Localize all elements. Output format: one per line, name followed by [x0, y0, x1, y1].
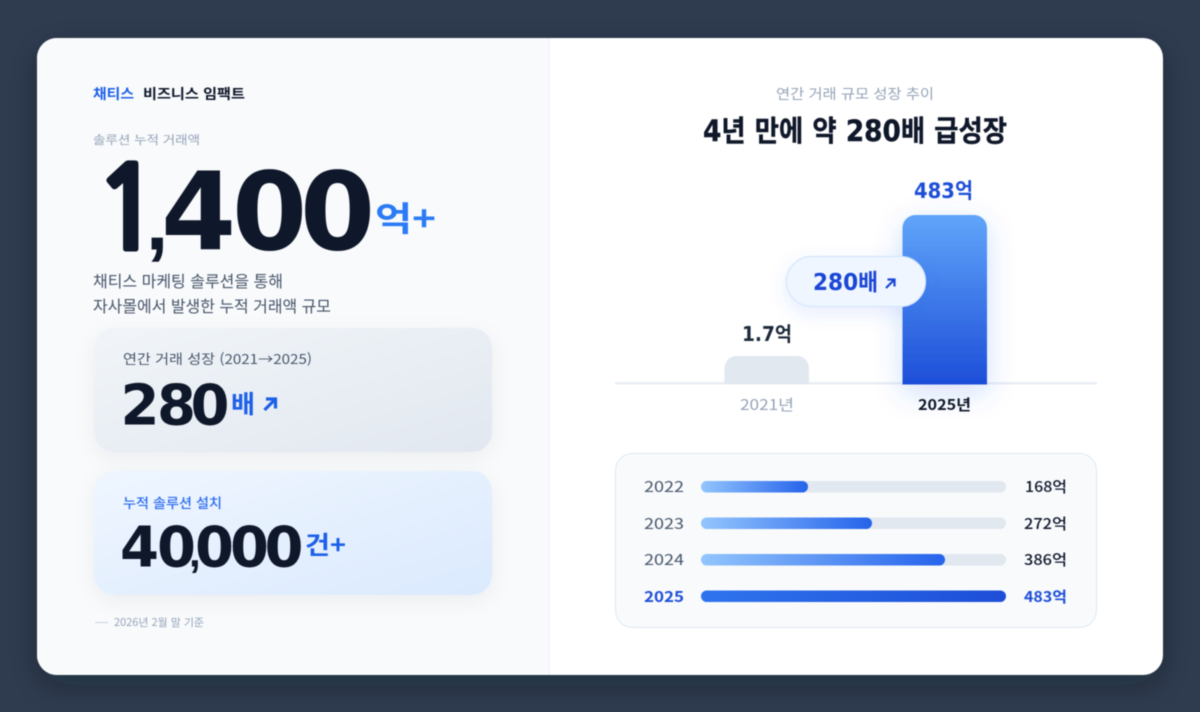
card label: 연간 거래 성장 (2021→2025): [123, 348, 312, 368]
footnote: 2026년 2월 말 기준: [114, 615, 204, 630]
bar: 2021: 1.7억: [742, 322, 792, 346]
card value: 280: 8: [157, 374, 196, 438]
bar chart: 2021 vs 2025: [615, 179, 1097, 415]
bar: 2025: 483억: [914, 179, 973, 203]
card value: 280: 0: [190, 374, 229, 438]
eyebrow: 연간 거래 규모 성장 추이: [776, 84, 934, 104]
bar: 2021: [724, 322, 809, 415]
big number: 1,400: [93, 150, 436, 276]
bar: 2025: [902, 179, 987, 415]
stat card: annual growth: [94, 328, 492, 452]
card value: 40,000: 0: [195, 516, 234, 580]
big number: 1,400: 억+: [375, 192, 436, 241]
row: 2022: 168억: [1025, 476, 1067, 497]
panel: right chart: [615, 84, 1097, 628]
big number: 1,400: 4: [161, 150, 236, 276]
row: 2022: [644, 476, 1067, 497]
card value: 280: 2: [120, 374, 159, 438]
card value: 40,000: 0: [230, 516, 269, 580]
card unit: 배: [231, 385, 255, 421]
heading: business impact: 채티스: [93, 84, 134, 104]
big number: 1,400: ,: [146, 178, 168, 266]
card value: 40,000: 0: [157, 516, 196, 580]
card label: 누적 솔루션 설치: [123, 492, 222, 512]
panel: left summary: [93, 84, 492, 630]
row: 2025: 2025: [644, 586, 684, 607]
label: cumulative volume: 솔루션 누적 거래액: [93, 131, 200, 148]
stat card: installs: [94, 471, 492, 595]
description: 채티스 마케팅 솔루션을 통해: [93, 268, 283, 292]
card value: 40,000: 0: [264, 516, 303, 580]
row: 2025: [644, 586, 1067, 607]
card value: 40,000: 4: [120, 516, 159, 580]
heading: business impact: [93, 84, 245, 104]
big number: 1,400: 1: [93, 152, 163, 268]
bar: 2025: 2025년: [918, 394, 971, 415]
row: 2023: [644, 513, 1067, 534]
card unit: 건+: [305, 526, 346, 562]
callout: 280x: 280배: [813, 270, 878, 296]
row: 2023: 272억: [1024, 513, 1067, 534]
row: 2022: 2022: [644, 476, 684, 497]
title: 4년 만에 약 280배 급성장: [703, 114, 1007, 148]
row: 2024: [644, 549, 1067, 570]
description: 자사몰에서 발생한 누적 거래액 규모: [93, 293, 331, 317]
row: 2024: 2024: [644, 549, 684, 570]
icon: up-right arrow: [264, 399, 276, 410]
row: 2024: 386억: [1024, 549, 1067, 570]
row: 2023: 2023: [644, 513, 684, 534]
bar: 2021: 2021년: [740, 394, 794, 415]
panel: yearly breakdown: [616, 454, 1096, 628]
big number: 1,400: 0: [300, 150, 375, 276]
callout: 280x: [786, 256, 926, 306]
big number: 1,400: 0: [232, 150, 307, 276]
heading: business impact: 비즈니스 임팩트: [143, 84, 245, 104]
card value: 40,000: ,: [189, 528, 201, 576]
description: [93, 268, 331, 317]
panel: left summary background: [37, 38, 550, 675]
icon: up-right arrow: [886, 280, 894, 288]
row: 2025: 483억: [1024, 586, 1067, 607]
